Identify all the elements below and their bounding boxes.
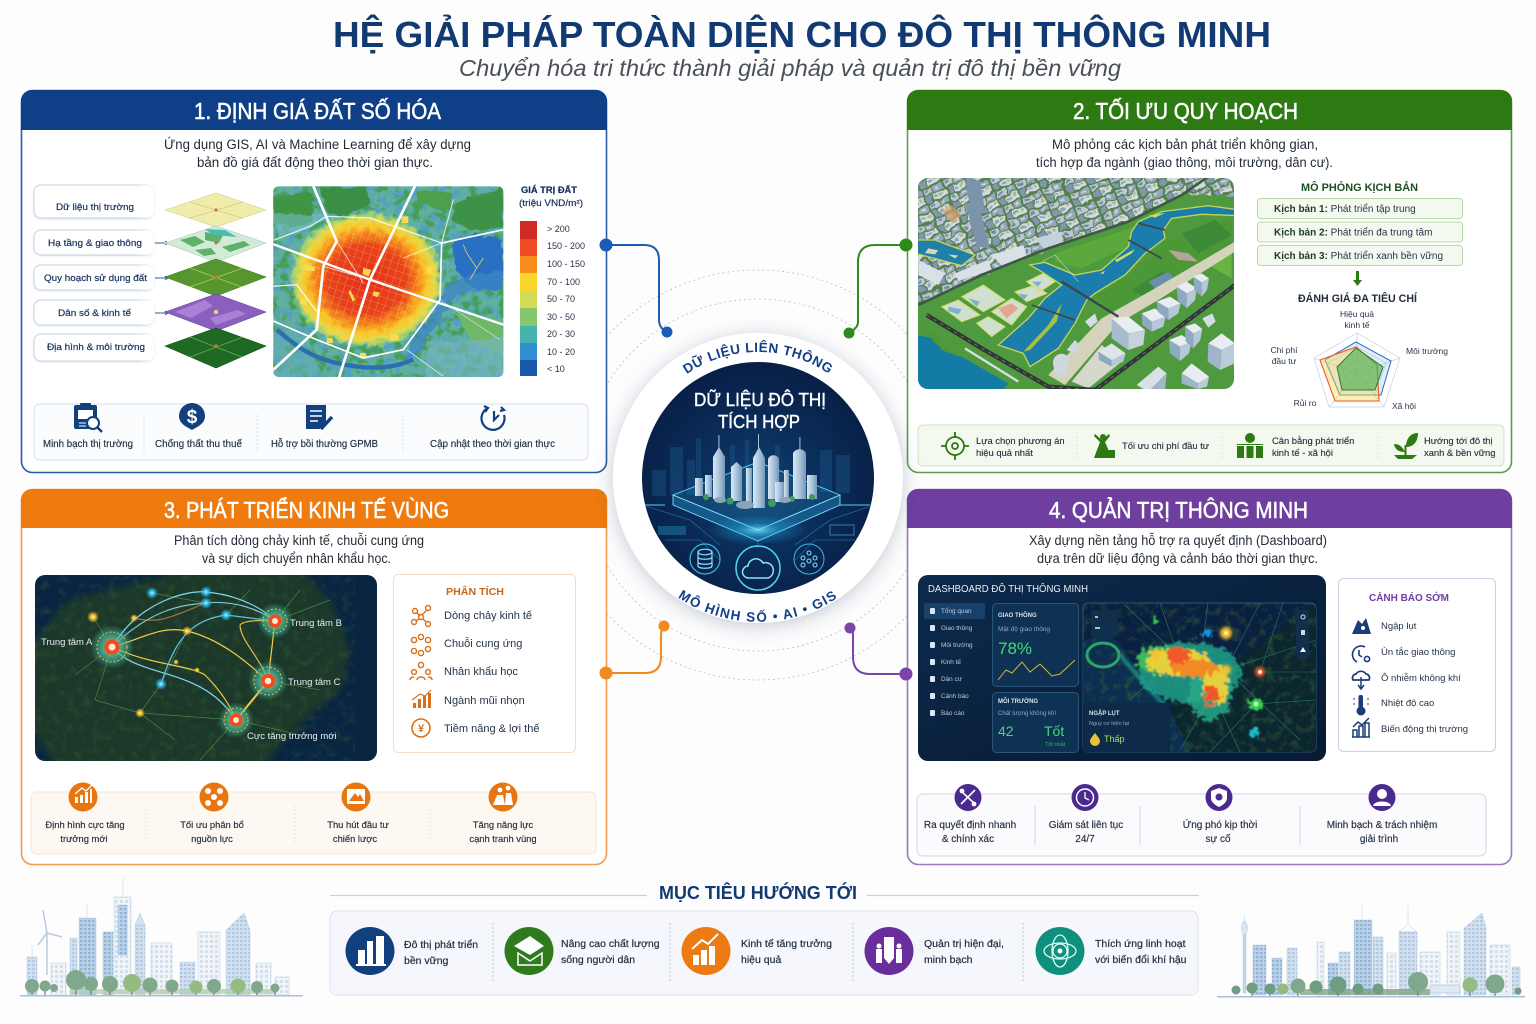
radar chart: multi-criteria evaluation	[1271, 292, 1448, 411]
regional flow map: Cực tăng trưởng mới	[247, 731, 337, 742]
layer: infrastructure: Hạ tầng & giao thông	[48, 238, 142, 249]
hub image	[642, 362, 874, 594]
item: flooding: Ngập lụt	[1381, 621, 1417, 632]
scenario 2	[1258, 222, 1462, 242]
map legend: 70 - 100	[547, 277, 580, 287]
dashboard sidebar: Tổng quan	[941, 607, 972, 615]
icon: target location	[941, 432, 969, 460]
icon: competitiveness	[488, 782, 518, 812]
panel 4 description: dựa trên dữ liệu động và cảnh báo thời gian thực.	[1037, 551, 1318, 566]
connector: panel 2 to hub	[844, 240, 912, 338]
panel 4 header	[907, 489, 1512, 528]
regional flow map: Trung tâm A	[41, 637, 93, 648]
layer: infrastructure	[34, 226, 266, 262]
environment card	[992, 692, 1078, 752]
dashboard sidebar: Báo cáo	[941, 710, 965, 717]
icon: response shield	[1206, 784, 1232, 811]
early warning list	[1338, 578, 1496, 752]
map legend	[519, 185, 585, 376]
item: high temperature: Nhiệt độ cao	[1381, 698, 1434, 709]
panel 1 description: Ứng dụng GIS, AI và Machine Learning để xây dựng	[164, 137, 471, 152]
icon: clock with refresh arrow	[482, 406, 505, 430]
map legend: GIÁ TRỊ ĐẤT	[521, 185, 578, 195]
goal: modern governance	[864, 927, 1004, 975]
panel 3 description: Phân tích dòng chảy kinh tế, chuỗi cung ứng	[174, 533, 424, 548]
benefit labels	[924, 818, 1437, 845]
panel 2 description	[1036, 137, 1333, 170]
goal: climate adaptation: với biến đổi khí hậu	[1095, 954, 1187, 966]
icon: decision routes	[954, 784, 982, 811]
buildings	[1053, 273, 1235, 392]
benefit labels: & chính xác	[942, 834, 994, 845]
icon: investment attraction	[342, 782, 370, 812]
radar chart: multi-criteria evaluation: Hiệu quả	[1340, 309, 1374, 319]
layer: land use planning: Quy hoạch sử dụng đất	[44, 273, 147, 284]
benefit labels: trưởng mới	[60, 833, 108, 844]
item: potential and advantages: Tiềm năng & lợi thế	[444, 723, 539, 735]
hub node C	[248, 661, 288, 701]
benefit labels: chiến lược	[333, 833, 377, 844]
aerial city planning scene	[918, 178, 1234, 389]
panel 3 description: và sự dịch chuyển nhân khẩu học.	[202, 551, 391, 566]
item: demographics: Nhân khẩu học	[444, 666, 518, 678]
smart city dashboard: DASHBOARD ĐÔ THỊ THÔNG MINH	[928, 582, 1088, 595]
goal: sustainable city: Đô thị phát triển	[404, 939, 478, 951]
item: flooding	[1352, 618, 1417, 634]
map legend: 150 - 200	[547, 241, 585, 251]
benefit labels: kinh tế - xã hội	[1272, 447, 1333, 458]
regional flow map: Trung tâm B	[290, 618, 342, 629]
item: air pollution	[1352, 671, 1461, 689]
heat map of land value	[270, 183, 510, 383]
scenario 3: Kịch bản 3: Phát triển xanh bền vững	[1274, 250, 1443, 262]
map legend: < 10	[547, 364, 565, 374]
layer: land use planning	[34, 259, 266, 296]
layer stack with labels	[34, 185, 266, 368]
growth pole node	[219, 703, 253, 737]
panel 1: land valuation	[21, 90, 607, 472]
dashboard sidebar: Dân cư	[941, 676, 963, 683]
goal: economic growth	[682, 927, 832, 975]
item: market volatility	[1352, 718, 1468, 737]
left skyline illustration	[20, 878, 303, 996]
connector: panel 1 to hub	[600, 240, 672, 336]
towers	[695, 434, 817, 508]
traffic card	[992, 604, 1078, 686]
item: market volatility: Biến động thị trường	[1381, 724, 1468, 735]
benefit labels: giải trình	[1360, 834, 1398, 845]
panel 4 description: Xây dựng nền tảng hỗ trợ ra quyết định (Dashboard)	[1029, 533, 1327, 548]
layer: population and economy	[34, 294, 266, 331]
panel 2 header	[907, 90, 1512, 130]
radar chart: multi-criteria evaluation: Xã hội	[1392, 401, 1416, 411]
panel 2 description: Mô phỏng các kịch bản phát triển không gian,	[1052, 137, 1318, 152]
item: demographics	[410, 662, 518, 680]
regional flow map	[35, 575, 377, 761]
panel 2 benefits bar	[918, 425, 1504, 466]
environment card: Tốt nhất	[1045, 742, 1066, 748]
icon: community balance	[1237, 433, 1263, 458]
benefit labels: Giám sát liên tục	[1049, 820, 1123, 831]
dashboard sidebar: Giao thông	[941, 625, 973, 632]
panel 2: planning optimisation	[907, 90, 1512, 472]
hub node A	[90, 625, 134, 669]
benefit labels: 24/7	[1075, 834, 1095, 845]
goal: modern governance: minh bạch	[924, 954, 973, 966]
icon: dollar shield: $	[187, 407, 198, 428]
flood sub-card	[1083, 703, 1170, 752]
smart city dashboard	[918, 575, 1326, 761]
benefit labels: hiệu quả nhất	[976, 447, 1033, 458]
map legend: (triệu VND/m²)	[519, 198, 583, 208]
panel 1 description	[164, 137, 471, 170]
goal: climate adaptation: Thích ứng linh hoạt	[1095, 938, 1186, 950]
benefit labels: Minh bạch thị trường	[43, 439, 133, 450]
goals panel	[330, 911, 1198, 995]
goal: sustainable city	[346, 927, 478, 975]
environment card: Chất lượng không khí	[998, 711, 1056, 717]
goals section heading: MỤC TIÊU HƯỚNG TỚI	[659, 882, 857, 903]
radar chart: multi-criteria evaluation: kinh tế	[1344, 320, 1370, 330]
benefit labels: Chống thất thu thuế	[155, 438, 242, 450]
item: supply chain	[411, 634, 522, 656]
panel 1 header: 1. ĐỊNH GIÁ ĐẤT SỐ HÓA	[194, 97, 442, 124]
connector: panel 3 to hub	[600, 622, 668, 678]
panel 2 description: tích hợp đa ngành (giao thông, môi trường, dân cư).	[1036, 155, 1333, 170]
item: potential and advantages	[412, 719, 539, 737]
scenario 2: Kịch bản 2: Phát triển đa trung tâm	[1274, 226, 1432, 238]
environment card: 42	[998, 723, 1014, 739]
benefit labels: Tối ưu chi phí đầu tư	[1122, 440, 1209, 451]
benefit labels: Thu hút đầu tư	[327, 819, 389, 830]
goal: sustainable city: bền vững	[404, 955, 449, 967]
benefit labels: nguồn lực	[191, 833, 233, 844]
panel 1 header	[21, 90, 607, 130]
panel 4 header: 4. QUẢN TRỊ THÔNG MINH	[1049, 495, 1308, 523]
hub image: TÍCH HỢP	[718, 412, 800, 432]
goal: quality of life: Nâng cao chất lượng	[561, 938, 660, 950]
icon: resource allocation	[200, 782, 228, 812]
traffic card: GIAO THÔNG	[998, 611, 1037, 619]
layer: terrain and environment	[34, 328, 266, 368]
benefit labels: Tăng năng lực	[473, 819, 534, 830]
subtitle: Chuyển hóa tri thức thành giải pháp và quản trị đô thị bền vững	[459, 55, 1121, 81]
map legend: 50 - 70	[547, 294, 575, 304]
item: economic flow: Dòng chảy kinh tế	[444, 610, 532, 622]
item: traffic jam	[1352, 646, 1455, 662]
panel 4 benefits bar	[917, 784, 1486, 856]
dashboard sidebar: Kinh tế	[941, 657, 961, 666]
benefit labels: Hỗ trợ bồi thường GPMB	[271, 437, 378, 450]
panel 3 header: 3. PHÁT TRIỂN KINH TẾ VÙNG	[164, 496, 449, 523]
panel 1 description: bản đồ giá đất động theo thời gian thực.	[197, 155, 433, 170]
item: economic flow	[412, 606, 532, 626]
flood sub-card: Thấp	[1104, 734, 1125, 744]
scenario 1	[1258, 198, 1462, 218]
radar chart: multi-criteria evaluation: Môi trường	[1406, 346, 1448, 356]
arrow down to evaluation	[1353, 271, 1362, 286]
panel 4 description	[1029, 533, 1327, 566]
dashboard heat map	[1083, 603, 1316, 752]
panel 1 benefits bar	[34, 403, 588, 460]
item: traffic jam: Ùn tắc giao thông	[1381, 647, 1455, 658]
icon: document with pen	[306, 405, 332, 429]
scenario 3	[1258, 246, 1462, 266]
icon: dollar shield	[179, 403, 205, 430]
analysis list	[394, 574, 576, 752]
item: spearhead sectors	[412, 690, 525, 708]
panel 3 description	[174, 533, 424, 566]
item: air pollution: Ô nhiễm không khí	[1381, 673, 1461, 684]
layer: population and economy: Dân số & kinh tế	[58, 308, 132, 319]
dashboard sidebar: Cảnh báo	[941, 693, 969, 700]
map legend: 30 - 50	[547, 312, 575, 322]
radar chart: multi-criteria evaluation: Rủi ro	[1294, 398, 1317, 408]
goal: economic growth: Kinh tế tăng trưởng	[741, 938, 832, 950]
early warning list: CẢNH BÁO SỚM	[1369, 591, 1449, 604]
analysis list: PHÂN TÍCH	[446, 585, 504, 598]
benefit labels: xanh & bền vững	[1424, 447, 1495, 458]
layer: market data	[34, 185, 266, 227]
flood sub-card: NGẬP LỤT	[1089, 710, 1120, 717]
icon: growth chart	[68, 782, 98, 812]
glass platform	[673, 462, 840, 530]
icon: accountability person	[1368, 784, 1396, 811]
dashboard sidebar	[924, 603, 985, 717]
icon: 24/7 monitoring clock	[1072, 784, 1098, 811]
benefit labels: Tối ưu phân bổ	[180, 819, 244, 830]
goal: quality of life: sống người dân	[561, 954, 635, 966]
map legend: 100 - 150	[547, 259, 585, 269]
curved caption top: DỮ LIỆU LIÊN THÔNG	[682, 340, 832, 374]
item: potential and advantages: ¥	[418, 723, 425, 735]
traffic card: Mật độ giao thông	[998, 626, 1050, 633]
central hub: integrated urban data	[603, 326, 913, 636]
panel 3 benefits bar	[31, 782, 596, 854]
benefit labels	[976, 435, 1495, 458]
right skyline illustration	[1217, 905, 1525, 998]
benefit labels: sự cố	[1205, 833, 1231, 845]
benefit labels	[43, 437, 555, 450]
item: high temperature	[1353, 695, 1434, 716]
panel 3: regional economic development	[21, 489, 607, 864]
layer: terrain and environment: Địa hình & môi trường	[47, 342, 145, 353]
flood sub-card: Nguy cơ hiện tại	[1089, 721, 1129, 727]
benefit labels: Ra quyết định nhanh	[924, 819, 1016, 831]
scenario 1: Kịch bản 1: Phát triển tập trung	[1274, 203, 1416, 215]
scenario simulation list: MÔ PHỎNG KỊCH BẢN	[1301, 181, 1418, 194]
layer: market data: Dữ liệu thị trường	[56, 202, 134, 213]
goal: modern governance: Quản trị hiện đại,	[924, 938, 1004, 950]
radar chart: multi-criteria evaluation: đầu tư	[1272, 356, 1297, 366]
goal: quality of life	[504, 927, 660, 975]
icon: network nodes	[794, 544, 824, 574]
map legend: 10 - 20	[547, 347, 575, 357]
scenario simulation list	[1258, 181, 1462, 266]
panel 2 header: 2. TỐI ƯU QUY HOẠCH	[1073, 97, 1298, 124]
icon: seedling	[1394, 433, 1418, 459]
map legend: > 200	[547, 224, 570, 234]
goal: economic growth: hiệu quả	[741, 954, 781, 966]
icon: cloud	[736, 546, 780, 590]
radar chart: multi-criteria evaluation: ĐÁNH GIÁ ĐA TIÊU CHÍ	[1298, 292, 1418, 305]
curved caption bottom: MÔ HÌNH SỐ • AI • GIS	[678, 590, 836, 622]
panel 4: smart governance	[907, 489, 1512, 864]
panel 3 header	[21, 489, 607, 528]
benefit labels: Ứng phó kịp thời	[1183, 818, 1257, 831]
radar chart: multi-criteria evaluation: Chi phí	[1271, 345, 1298, 355]
benefit labels: Lựa chọn phương án	[976, 435, 1065, 446]
goal: climate adaptation	[1036, 927, 1187, 975]
connector rings around the hub	[607, 270, 907, 680]
item: supply chain: Chuỗi cung ứng	[444, 637, 522, 650]
icon: database	[690, 544, 720, 574]
benefit labels	[45, 819, 537, 844]
environment card: Tốt	[1044, 723, 1064, 739]
traffic card: 78%	[998, 639, 1032, 658]
benefit labels: Định hình cực tăng	[45, 819, 125, 830]
benefit labels: cạnh tranh vùng	[469, 833, 537, 844]
hub image: DỮ LIỆU ĐÔ THỊ	[694, 389, 826, 410]
benefit labels: Minh bạch & trách nhiệm	[1327, 820, 1437, 831]
title: HỆ GIẢI PHÁP TOÀN DIỆN CHO ĐÔ THỊ THÔNG MINH	[333, 13, 1271, 55]
dashboard sidebar: Môi trường	[941, 642, 973, 649]
icon: figure with cost	[1094, 434, 1115, 458]
environment card: MÔI TRƯỜNG	[998, 697, 1038, 705]
hub node B	[257, 603, 293, 639]
benefit labels: Hướng tới đô thị	[1424, 435, 1493, 446]
benefit labels: Cân bằng phát triển	[1272, 435, 1354, 446]
map legend: 20 - 30	[547, 329, 575, 339]
benefit labels: Cập nhật theo thời gian thực	[430, 439, 555, 450]
regional flow map: Trung tâm C	[288, 677, 341, 688]
item: spearhead sectors: Ngành mũi nhọn	[444, 695, 525, 707]
connector: panel 4 to hub	[846, 624, 912, 680]
icon: clipboard with magnifier	[74, 403, 102, 432]
